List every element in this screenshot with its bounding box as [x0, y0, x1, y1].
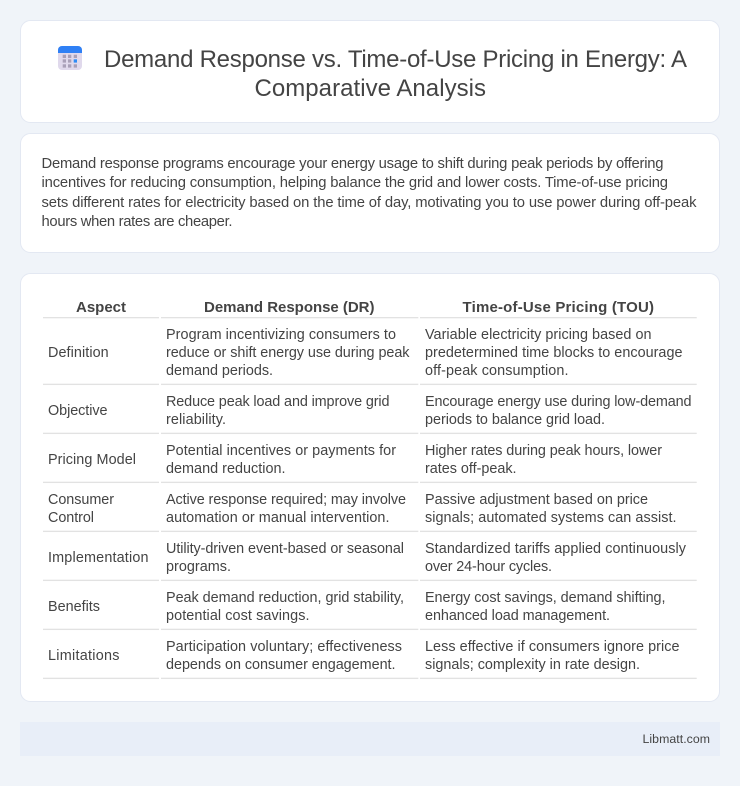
row: Benefits: Benefits	[48, 599, 100, 615]
row: Consumer Control: signals; automated systems can assist.	[425, 510, 676, 526]
row: Pricing Model: rates off-peak.	[425, 461, 516, 477]
panel: comparison table	[20, 274, 720, 702]
row: Objective: Reduce peak load and improve grid	[166, 394, 390, 410]
row: Definition: Definition	[48, 345, 109, 361]
row: Benefits: Peak demand reduction, grid stability,	[166, 590, 404, 606]
row: Implementation: Standardized tariffs applied continuously	[425, 541, 687, 557]
row: Pricing Model	[43, 443, 697, 483]
row: Consumer Control	[43, 492, 697, 532]
row: Benefits	[43, 590, 697, 630]
row: Definition: predetermined time blocks to encourage	[425, 345, 682, 361]
row: Consumer Control: automation or manual intervention.	[166, 510, 390, 526]
row: Implementation: Utility-driven event-based or seasonal	[166, 541, 404, 557]
row: Benefits: enhanced load management.	[425, 608, 610, 624]
text block: introduction: Demand response programs encourage your energy usage to shift during peak periods by offering	[42, 156, 664, 172]
row: Limitations	[43, 639, 697, 679]
panel: title card	[20, 20, 720, 122]
row: Consumer Control: Consumer	[48, 492, 114, 508]
footer bar	[20, 722, 720, 756]
header: Aspect: Aspect	[76, 299, 126, 316]
row: Implementation: Implementation	[48, 550, 148, 566]
title: Comparative Analysis	[254, 75, 486, 102]
text block: introduction: incentives for reducing consumption, helping balance the grid and lower costs. Time-of-use pricing	[42, 175, 668, 191]
row: Limitations: depends on consumer engagement.	[166, 657, 396, 673]
panel: introduction	[20, 134, 720, 252]
icon: calendar	[58, 46, 82, 70]
row: Consumer Control: Active response required; may involve	[166, 492, 406, 508]
row: Pricing Model: Potential incentives or payments for	[166, 443, 396, 459]
row: Pricing Model: Higher rates during peak hours, lower	[425, 443, 662, 459]
header: Demand Response: Demand Response (DR)	[204, 299, 374, 316]
row: Benefits: Energy cost savings, demand shifting,	[425, 590, 666, 606]
row: Implementation	[43, 541, 697, 581]
text block: introduction: sets different rates for electricity based on the time of day, motivating you to use power during off-peak	[42, 195, 697, 211]
title: Demand Response vs. Time-of-Use Pricing in Energy: A	[104, 46, 687, 73]
row: Limitations: signals; complexity in rate design.	[425, 657, 640, 673]
row: Benefits: potential cost savings.	[166, 608, 310, 624]
row: Limitations: Participation voluntary; effectiveness	[166, 639, 402, 655]
row: Objective: Objective	[48, 403, 108, 419]
text block: introduction	[42, 156, 697, 230]
row: Objective: Encourage energy use during low-demand	[425, 394, 692, 410]
row: Objective	[43, 394, 697, 434]
row: Definition: Program incentivizing consumers to	[166, 327, 396, 343]
row: Objective: periods to balance grid load.	[425, 412, 605, 428]
row: Limitations: Less effective if consumers ignore price	[425, 639, 680, 655]
row: Consumer Control: Passive adjustment based on price	[425, 492, 648, 508]
row: Definition: reduce or shift energy use during peak	[166, 345, 410, 361]
row: Limitations: Limitations	[48, 648, 120, 664]
row: Consumer Control: Control	[48, 510, 94, 526]
row: Definition: demand periods.	[166, 363, 273, 379]
header: Time-of-Use Pricing: Time-of-Use Pricing (TOU)	[462, 299, 654, 316]
row: Implementation: over 24-hour cycles.	[425, 559, 552, 575]
row: Pricing Model: demand reduction.	[166, 461, 286, 477]
row: Pricing Model: Pricing Model	[48, 452, 136, 468]
table header row	[43, 299, 697, 318]
row: Definition: Variable electricity pricing based on	[425, 327, 652, 343]
row: Definition	[43, 327, 697, 385]
row: Objective: reliability.	[166, 412, 226, 428]
footer text: Libmatt.com	[642, 732, 710, 746]
text block: introduction: hours when rates are cheaper.	[42, 214, 232, 230]
row: Implementation: programs.	[166, 559, 231, 575]
title	[104, 46, 687, 102]
row: Definition: off-peak consumption.	[425, 363, 568, 379]
